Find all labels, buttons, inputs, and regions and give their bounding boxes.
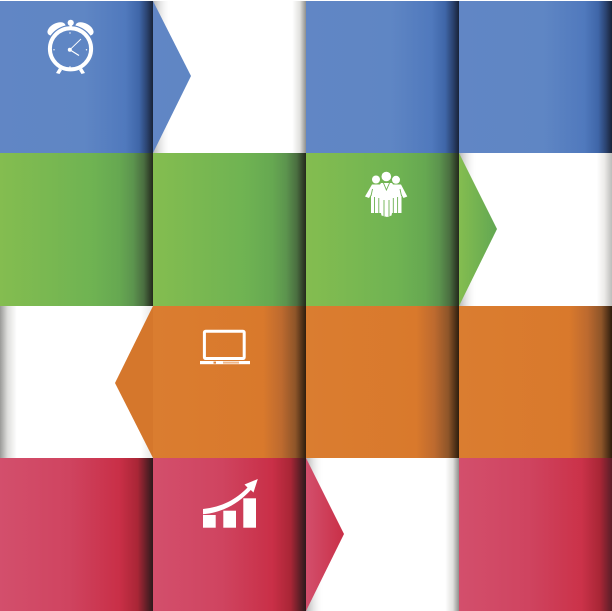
row: green ribbon xyxy=(0,153,612,306)
panel: blue cell 4 xyxy=(459,1,612,153)
panel: green cell 2 xyxy=(153,153,306,306)
row: orange ribbon xyxy=(0,306,612,458)
panel: green cell with people xyxy=(306,153,459,306)
panel: blue cell with clock xyxy=(0,1,153,153)
icon: group of people xyxy=(365,172,407,217)
arrow: orange pointing left xyxy=(115,306,153,458)
row: blue ribbon xyxy=(0,1,612,153)
shadow: white cell second row left edge xyxy=(459,153,477,306)
row: red ribbon xyxy=(0,458,612,611)
icon: laptop xyxy=(200,331,250,364)
panel: white cell bottom row xyxy=(306,458,459,611)
arrow: red pointing right xyxy=(306,458,344,611)
panel: red cell 4 xyxy=(459,458,612,611)
panel: orange cell 4 xyxy=(459,306,612,458)
shadow: white cell bottom row left edge xyxy=(306,458,324,611)
icon: growth chart xyxy=(203,479,258,528)
panel: red cell 1 xyxy=(0,458,153,611)
arrow: green pointing right xyxy=(459,153,497,306)
shadow: white cell top row left edge xyxy=(153,1,171,153)
panel: white cell top row xyxy=(153,1,306,153)
panel: green cell 1 xyxy=(0,153,153,306)
panel: orange cell with laptop xyxy=(153,306,306,458)
arrow: blue pointing right xyxy=(153,1,191,153)
panel: white cell third row xyxy=(0,306,153,458)
panel: blue cell 3 xyxy=(306,1,459,153)
panel: white cell second row xyxy=(459,153,612,306)
panel: red cell with chart xyxy=(153,458,306,611)
icon: alarm clock xyxy=(45,19,96,74)
panel: orange cell 3 xyxy=(306,306,459,458)
